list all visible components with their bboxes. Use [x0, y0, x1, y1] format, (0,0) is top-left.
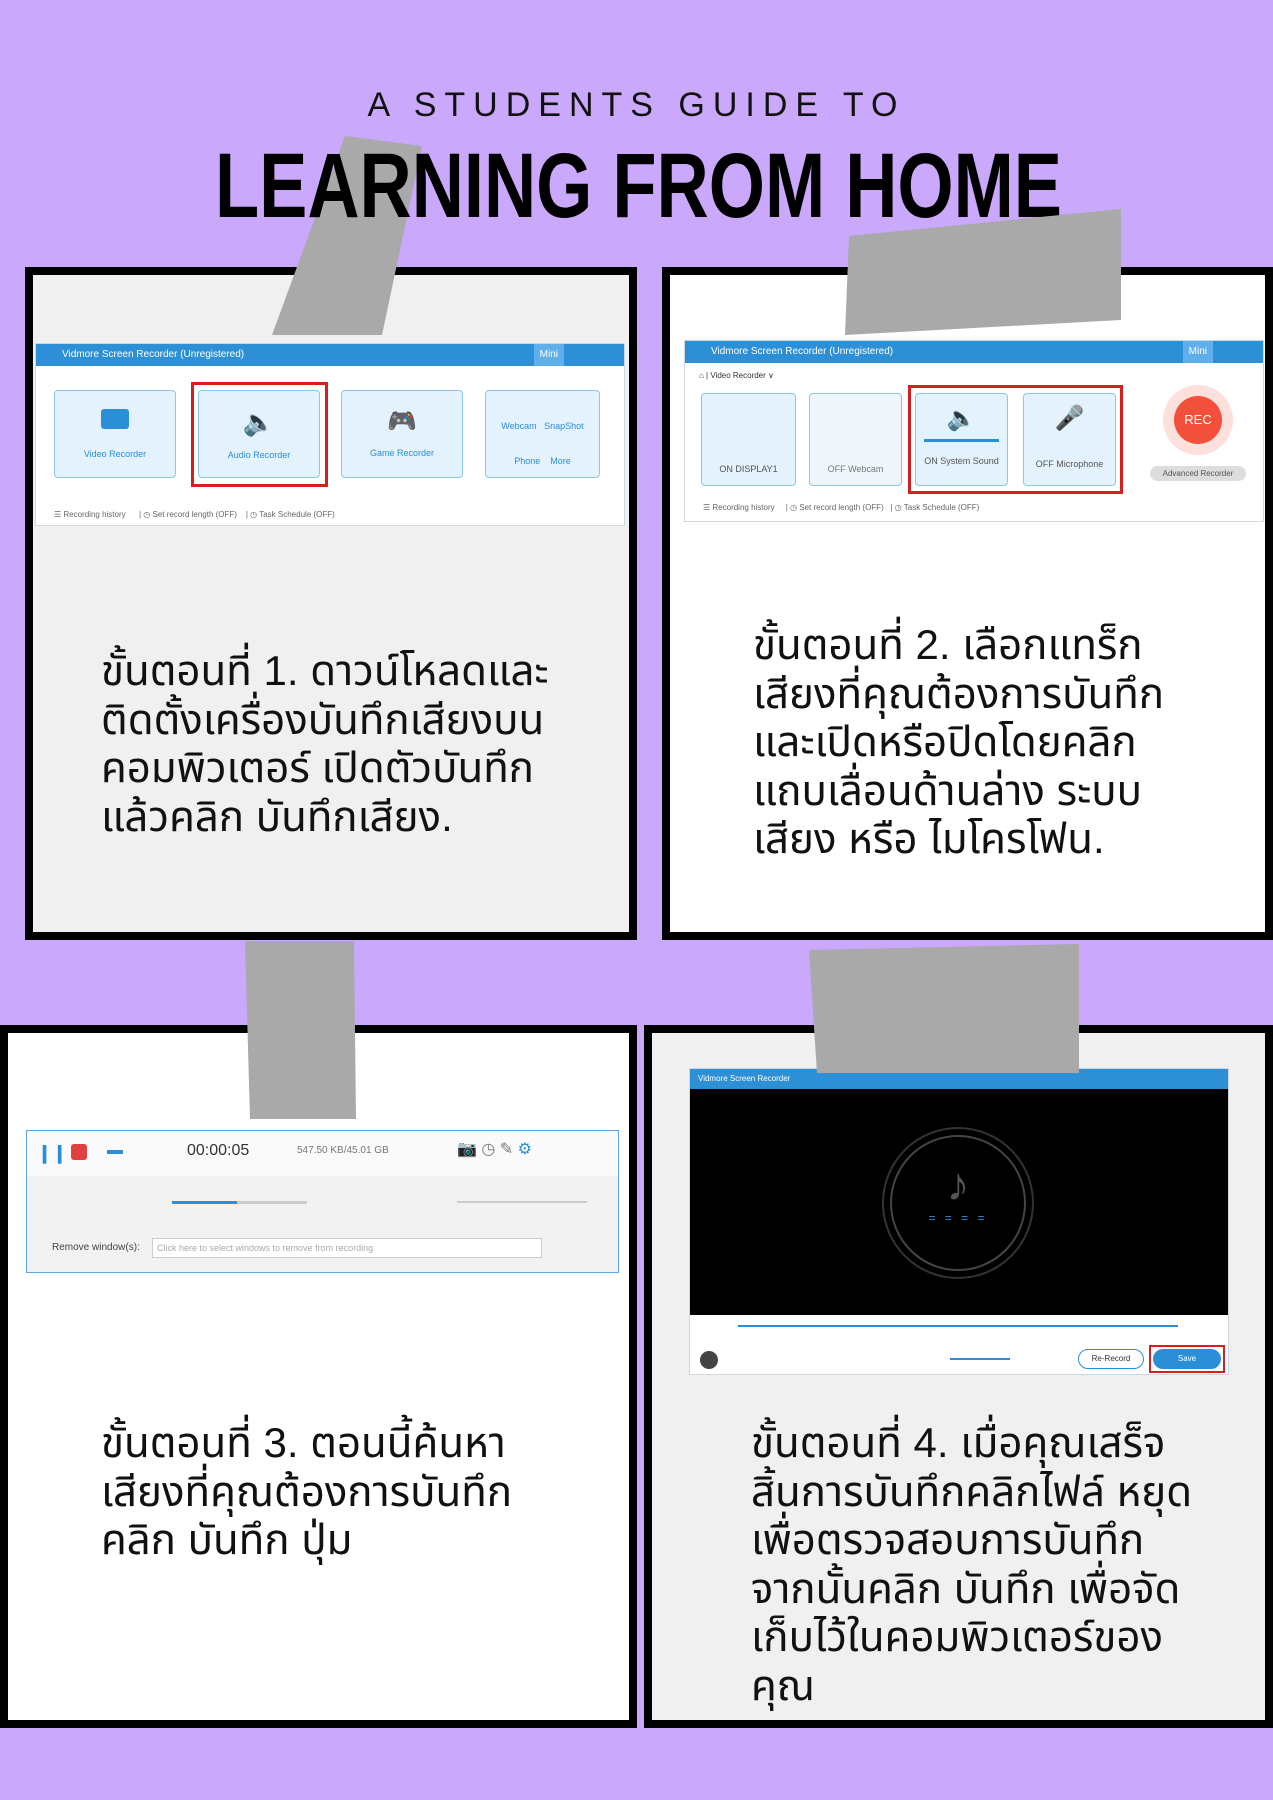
screenshot: recorder settings: Mini — [1189, 346, 1207, 357]
panel: step 3 — [0, 1025, 637, 1728]
text: step 2: แถบเลื่อนด้านล่าง ระบบ — [753, 766, 1142, 814]
text: step 4 — [751, 1414, 1192, 1711]
screenshot: recording toolbar: Remove window(s): — [52, 1242, 140, 1253]
screenshot: recorder settings: ☰ Recording history | ◷ Set record length (OFF) | ◷ Task Schedule (OFF) — [703, 503, 979, 512]
screenshot: main recorder window: Audio Recorder — [228, 450, 290, 460]
text: step 1: ขั้นตอนที่ 1. ดาวน์โหลดและ — [101, 647, 549, 694]
screenshot: playback window — [689, 1068, 1229, 1375]
text: step 4: สิ้นการบันทึกคลิกไฟล์ หยุด — [751, 1468, 1192, 1514]
text: step 3: คลิก บันทึก ปุ่ม — [101, 1516, 352, 1563]
screenshot: recording toolbar: 📷 ◷ ✎ ⚙ — [457, 1141, 532, 1158]
text: step 3: เสียงที่คุณต้องการบันทึก — [101, 1468, 512, 1514]
screenshot: recording toolbar — [26, 1130, 619, 1273]
screenshot: recording toolbar: 00:00:05 — [187, 1142, 249, 1159]
screenshot: recording toolbar: 547.50 KB/45.01 GB — [297, 1145, 389, 1156]
text: step 4: เพื่อตรวจสอบการบันทึก — [751, 1516, 1144, 1563]
panel: step 2 — [662, 267, 1273, 940]
icon: music note: ♪ — [946, 1158, 970, 1210]
screenshot: recording toolbar: ❙❙ — [37, 1143, 67, 1163]
screenshot: playback window: Re-Record — [1092, 1354, 1130, 1363]
screenshot: main recorder window: Vidmore Screen Recorder (Unregistered) — [62, 349, 244, 360]
screenshot: main recorder window: Webcam SnapShot — [501, 421, 584, 431]
icon: REC button — [1163, 385, 1233, 455]
screenshot: main recorder window — [35, 343, 625, 526]
text: step 2 — [753, 616, 1164, 862]
screenshot: main recorder window: ☰ Recording history | ◷ Set record length (OFF) | ◷ Task Schedule (OFF) — [54, 510, 335, 519]
screenshot: recorder settings: ON System Sound — [924, 456, 999, 466]
screenshot: recorder settings: ON DISPLAY1 — [719, 464, 778, 474]
screenshot: recorder settings: ⌂ | Video Recorder ∨ — [699, 371, 774, 380]
highlight box — [191, 382, 328, 487]
tape: middle-left — [245, 941, 356, 1119]
screenshot: playback window: Vidmore Screen Recorder — [698, 1074, 790, 1083]
screenshot: main recorder window: Phone More — [514, 456, 571, 466]
screenshot: recorder settings — [684, 340, 1264, 522]
text: step 2: เสียง หรือ ไมโครโฟน. — [753, 815, 1105, 862]
screenshot: main recorder window: 🔈 — [243, 407, 275, 437]
tape: middle-right — [809, 944, 1079, 1073]
screenshot: main recorder window: Video Recorder — [84, 449, 146, 459]
screenshot: recorder settings: Vidmore Screen Recorder (Unregistered) — [711, 346, 893, 357]
text: step 4: ขั้นตอนที่ 4. เมื่อคุณเสร็จ — [751, 1419, 1165, 1466]
text: step 1: คอมพิวเตอร์ เปิดตัวบันทึก — [101, 744, 534, 791]
screenshot: recorder settings: 🎤 — [1055, 405, 1084, 432]
text: step 2: เสียงที่คุณต้องการบันทึก — [753, 670, 1164, 716]
text: step 2: และเปิดหรือปิดโดยคลิก — [753, 718, 1137, 765]
tape: top-right — [845, 209, 1121, 335]
screenshot: recorder settings: 🔈 — [947, 405, 976, 432]
text: step 2: ขั้นตอนที่ 2. เลือกแทร็ก — [753, 621, 1143, 668]
screenshot: main recorder window: Mini — [540, 349, 558, 360]
text: step 4: เก็บไว้ในคอมพิวเตอร์ของ — [751, 1613, 1163, 1660]
text: step 1: แล้วคลิก บันทึกเสียง. — [101, 792, 453, 840]
tape: top-left — [272, 136, 422, 335]
icon: REC button: REC — [1184, 412, 1212, 427]
text: step 4: คุณ — [751, 1662, 815, 1708]
screenshot: recorder settings: OFF Microphone — [1036, 459, 1103, 469]
text: step 1: ติดตั้งเครื่องบันทึกเสียงบน — [101, 696, 544, 742]
text: step 3: ขั้นตอนที่ 3. ตอนนี้ค้นหา — [101, 1419, 506, 1466]
icon: music note: = = = = — [928, 1211, 988, 1225]
text: step 4: จากนั้นคลิก บันทึก เพื่อจัด — [751, 1564, 1180, 1612]
panel: step 4 — [644, 1025, 1273, 1728]
screenshot: main recorder window: Game Recorder — [370, 448, 434, 458]
screenshot: main recorder window: 🎮 — [387, 408, 417, 435]
title: subtitle: A STUDENTS GUIDE TO — [367, 86, 906, 124]
panel: step 1 — [25, 267, 637, 940]
screenshot: recorder settings: Advanced Recorder — [1163, 469, 1233, 478]
screenshot: recording toolbar: Click here to select windows to remove from recording — [157, 1243, 373, 1253]
screenshot: recorder settings: OFF Webcam — [828, 464, 883, 474]
icon: music note — [890, 1135, 1026, 1271]
screenshot: playback window: Save — [1178, 1354, 1196, 1363]
text: step 3 — [101, 1414, 512, 1565]
text: step 1 — [101, 642, 549, 840]
